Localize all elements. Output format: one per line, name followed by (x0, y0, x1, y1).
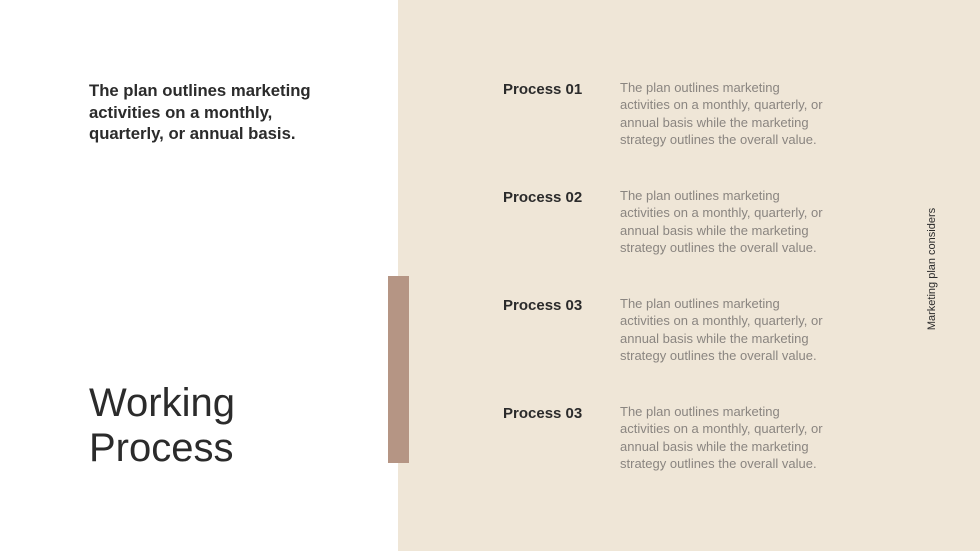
process 02 text: annual basis while the marketing (620, 223, 809, 238)
intro text: quarterly, or annual basis. (89, 124, 296, 143)
panel: beige background (398, 0, 980, 551)
process 02 text: strategy outlines the overall value. (620, 240, 817, 255)
process 02 (503, 188, 823, 255)
process 01 text: strategy outlines the overall value. (620, 132, 817, 147)
process 03 (503, 296, 823, 363)
accent bar (388, 276, 409, 463)
process 01 heading: Process 01 (503, 81, 582, 98)
process 03 heading: Process 03 (503, 297, 582, 314)
process 04 text: activities on a monthly, quarterly, or (620, 421, 823, 436)
process 04 heading: Process 03 (503, 405, 582, 422)
process 02 text (620, 188, 823, 255)
process 04 text: annual basis while the marketing (620, 439, 809, 454)
process 02 text: activities on a monthly, quarterly, or (620, 205, 823, 220)
process 03 text: strategy outlines the overall value. (620, 348, 817, 363)
title: Working (89, 381, 235, 425)
intro text: activities on a monthly, (89, 102, 272, 122)
process 03 text: activities on a monthly, quarterly, or (620, 313, 823, 328)
process 01 (503, 80, 823, 147)
process 04 text: The plan outlines marketing (620, 404, 780, 419)
process 03 text (620, 296, 823, 363)
vertical side label: Marketing plan considers (926, 208, 938, 330)
intro text (89, 81, 311, 143)
process 01 text (620, 80, 823, 147)
title (89, 381, 235, 470)
process 02 heading: Process 02 (503, 189, 582, 206)
process 04 text (620, 404, 823, 471)
process 04 (503, 404, 823, 471)
process 01 text: annual basis while the marketing (620, 115, 809, 130)
process 01 text: The plan outlines marketing (620, 80, 780, 95)
process 03 text: The plan outlines marketing (620, 296, 780, 311)
intro text: The plan outlines marketing (89, 81, 311, 100)
process 01 text: activities on a monthly, quarterly, or (620, 97, 823, 112)
process 04 text: strategy outlines the overall value. (620, 456, 817, 471)
title: Process (89, 426, 234, 470)
process 02 text: The plan outlines marketing (620, 188, 780, 203)
process 03 text: annual basis while the marketing (620, 331, 809, 346)
